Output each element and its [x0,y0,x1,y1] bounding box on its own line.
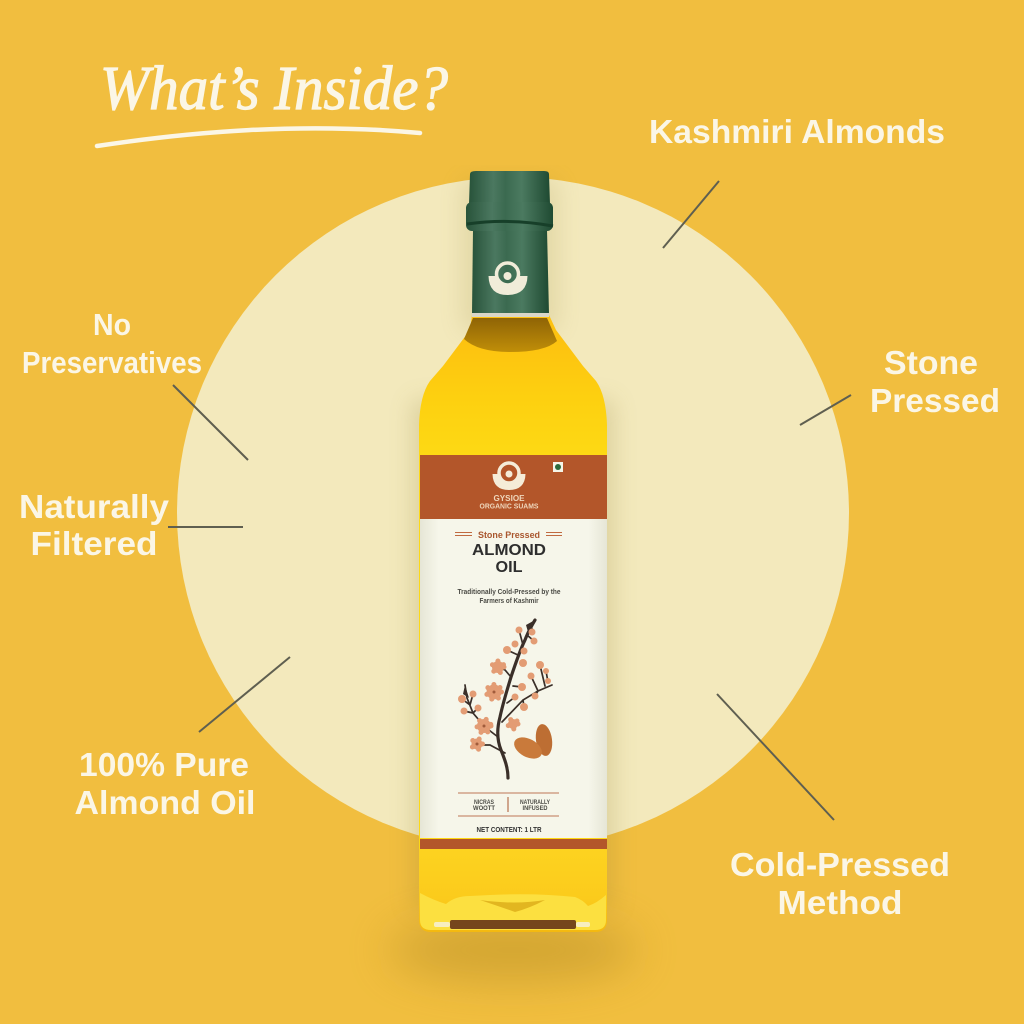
label: cream panel: Farmers of Kashmir [480,598,539,605]
callout: Cold-Pressed Method: Cold-Pressed [730,846,950,883]
pale circle backdrop [177,177,849,849]
callout: No Preservatives [22,307,248,460]
label heading lines [455,532,562,536]
label: bottom stripe [420,839,607,849]
callout: 100% Pure Almond Oil: 100% Pure [79,746,249,783]
callout: Cold-Pressed Method: Method [778,884,902,921]
callout: No Preservatives: Preservatives [22,345,202,380]
blossom centres [476,690,496,746]
label: cream panel: Stone Pressed [478,530,540,541]
label: brown header: GYSIOE [494,493,525,503]
label specs box: NICRAS [474,800,494,806]
callout: Cold-Pressed Method [717,694,950,921]
title underline [97,128,420,146]
callout: Naturally Filtered: Naturally [19,488,170,525]
green cap [469,171,550,204]
label: cream panel: ALMOND [472,542,546,559]
callout: Stone Pressed: Stone [884,344,978,381]
callout: Kashmiri Almonds: Kashmiri Almonds [649,113,945,150]
green foil neck [472,230,549,314]
callout: Stone Pressed [800,344,1000,425]
buds [458,626,551,714]
label specs box: INFUSED [522,806,548,812]
illustration: almond branch [458,620,554,778]
icon: label logo [492,463,526,490]
label: cream panel [420,519,607,838]
label: cream panel: OIL [496,559,522,576]
callout: Naturally Filtered [19,488,243,562]
neck ring [472,313,549,317]
icon: veg mark [553,462,563,472]
icon: neck logo [488,263,528,295]
bottle side shadow [412,400,614,910]
label specs box [458,793,559,816]
label specs box: NATURALLY [520,800,550,806]
glass body with oil [419,315,607,855]
bottle base [419,849,607,932]
net content: NET CONTENT: 1 LTR [476,825,542,834]
almonds [511,723,554,763]
label: brown header [420,455,607,519]
blossoms [472,661,518,750]
callout: Stone Pressed: Pressed [870,382,1000,419]
dark oil surface in shoulder [464,318,557,352]
title: What's Inside?: What’s Inside? [100,55,448,123]
label: brown header: ORGANIC SUAMS [480,502,538,510]
bottle [419,171,607,932]
bottle ground shadow [388,918,638,982]
cap collar [466,202,553,231]
callout: No Preservatives: No [93,307,131,342]
label specs box: WOOTT [473,806,495,812]
callout: Naturally Filtered: Filtered [30,525,158,562]
callout: 100% Pure Almond Oil [74,657,290,821]
callout: Kashmiri Almonds [649,113,945,248]
bottle neck shadow [462,180,558,330]
callout: 100% Pure Almond Oil: Almond Oil [74,784,256,821]
label: cream panel: Traditionally Cold-Pressed by the [458,589,561,596]
